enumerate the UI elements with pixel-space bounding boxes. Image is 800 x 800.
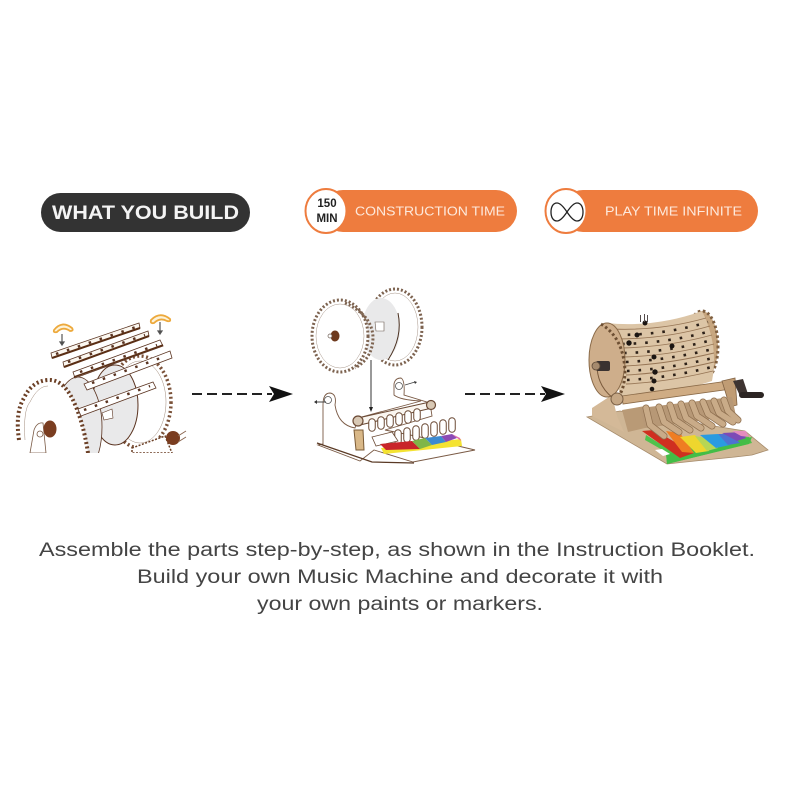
arrow down	[370, 360, 372, 408]
right gear hub	[132, 436, 172, 453]
icon: yellow clips	[54, 315, 170, 332]
front gear	[312, 300, 368, 372]
back disc	[362, 298, 400, 360]
illustration: exploded drum strips	[16, 314, 186, 453]
xylophone green base	[645, 435, 752, 464]
axle	[596, 361, 610, 371]
hammers	[646, 400, 738, 436]
axle	[30, 423, 46, 453]
frame	[318, 378, 475, 462]
illustration: drum assembled over frame	[312, 289, 475, 463]
base board	[587, 411, 768, 464]
frame circles	[324, 396, 332, 404]
front disc	[589, 323, 625, 397]
badge: construction time: MIN	[316, 213, 338, 225]
front gear	[54, 386, 88, 453]
badge: construction time: CONSTRUCTION TIME	[355, 204, 505, 218]
caption text: your own paints or markers.	[257, 594, 543, 615]
xylophone bars	[642, 430, 694, 458]
badge: play time infinite	[546, 189, 758, 233]
badge: what you build	[41, 193, 250, 232]
caption text: Assemble the parts step-by-step, as shown in the Instruction Booklet.	[39, 540, 755, 561]
badge: what you build: WHAT YOU BUILD	[52, 202, 239, 224]
axle	[330, 330, 340, 342]
rods	[358, 402, 432, 425]
illustration: finished music machine	[587, 311, 768, 464]
drum holes	[616, 322, 713, 380]
back gear	[368, 289, 422, 365]
strips	[51, 323, 172, 420]
back gear	[120, 354, 173, 448]
drum pegs	[626, 314, 674, 391]
xylophone	[381, 439, 462, 454]
arrows: down	[60, 322, 162, 345]
caption text: Build your own Music Machine and decorate it with	[137, 567, 663, 588]
arrow: step two to three	[465, 386, 565, 402]
hammers	[372, 412, 452, 441]
drum slats	[612, 318, 714, 384]
drum body	[606, 311, 714, 396]
badge: construction time: 150	[317, 198, 337, 210]
caption text	[39, 540, 755, 615]
icon: infinity	[551, 203, 583, 221]
arrow: step one to two	[192, 386, 293, 402]
side panel	[592, 395, 624, 432]
badge: play time infinite: PLAY TIME INFINITE	[605, 204, 742, 218]
gray front disc	[64, 376, 102, 453]
top rod	[622, 381, 731, 404]
hammer back panel	[640, 397, 736, 428]
badge: construction time	[306, 189, 517, 233]
crank	[722, 378, 737, 407]
rear gear end	[686, 311, 718, 381]
back disc	[92, 365, 138, 445]
support block	[622, 406, 645, 432]
